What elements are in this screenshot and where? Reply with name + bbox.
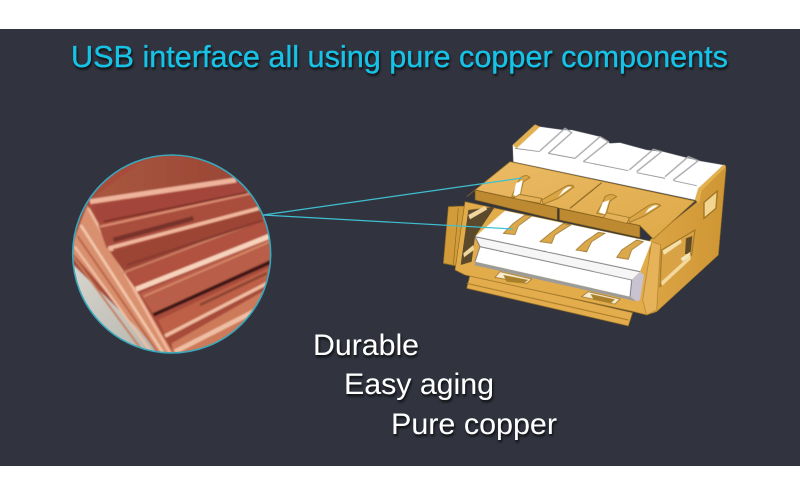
callout lines	[263, 178, 522, 229]
white tongue	[475, 211, 652, 301]
copper strips	[93, 183, 252, 222]
feature: durable: Durable	[313, 329, 419, 362]
right front post	[643, 242, 661, 315]
front flange	[475, 190, 557, 220]
left opening window	[461, 207, 495, 265]
side window	[660, 230, 695, 287]
top sheet surface	[94, 157, 232, 198]
circle outline	[73, 155, 271, 353]
side small window	[704, 191, 717, 218]
USB connector illustration	[443, 124, 726, 326]
back white block	[513, 124, 726, 203]
bottom clips	[495, 272, 620, 304]
plate seam	[570, 183, 602, 208]
photo: copper sheets in circle	[70, 153, 273, 357]
feature list	[313, 329, 557, 441]
top contact springs	[512, 175, 661, 223]
feature: pure copper: Pure copper	[391, 408, 557, 441]
bottom flange	[467, 275, 633, 326]
title: USB interface all using pure copper components	[71, 39, 728, 74]
right side wall	[647, 165, 726, 315]
top gold plate	[467, 162, 695, 239]
feature: easy aging: Easy aging	[344, 368, 494, 401]
tongue contacts	[503, 215, 643, 259]
strip highlights	[90, 180, 236, 202]
grey table	[74, 264, 156, 351]
dark strip shadows	[103, 193, 247, 222]
inner housing	[455, 202, 657, 315]
left stacked sheet edges	[70, 205, 175, 357]
left tab	[443, 206, 466, 267]
